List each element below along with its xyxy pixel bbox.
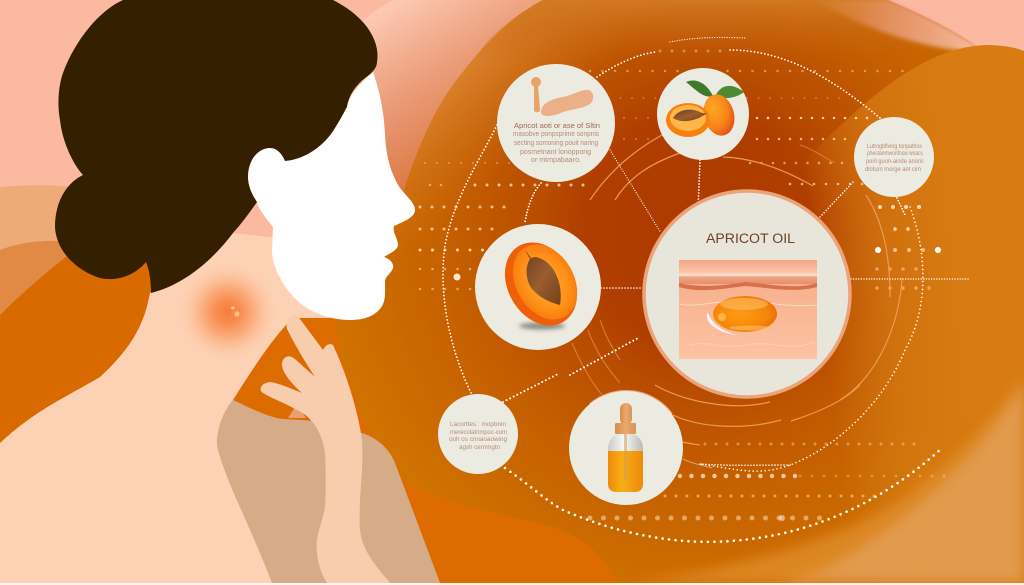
- body text: ooh os cnnaoaowing: [449, 436, 507, 443]
- background: lower right light lobe: [780, 380, 1024, 583]
- hair: [55, 0, 378, 293]
- icon: halved apricot: [666, 103, 710, 137]
- body text: secting somoning pouit naring: [514, 138, 598, 147]
- panel: dropper bottle circle: [569, 391, 683, 505]
- icon: whole apricot: [699, 91, 739, 139]
- body and neck: [0, 230, 330, 583]
- icon: dropper collar: [615, 423, 636, 434]
- skin cross-section: [679, 260, 817, 359]
- person illustration: [0, 0, 440, 583]
- icon: leaves: [686, 81, 713, 97]
- bottom edge: [0, 583, 1024, 585]
- background: main orange blob: [335, 0, 1024, 583]
- background: right orange lobe: [800, 45, 1024, 583]
- body text: phestanmwonfncw woacs: [867, 150, 924, 157]
- icon: bottle oil: [608, 451, 643, 492]
- body text: merecolatrimpoc-cum: [450, 429, 507, 436]
- body text: [449, 421, 507, 451]
- body text: poril guon-ainde anoric: [866, 158, 925, 165]
- icon: dropper tube: [624, 434, 627, 480]
- background: salmon blob: [320, 0, 1024, 583]
- icon: dropper bulb: [620, 403, 632, 425]
- icon: oil drop: [707, 296, 777, 335]
- heading: APRICOT OIL: [706, 231, 796, 246]
- icon: apricot half: [490, 229, 592, 339]
- face: [248, 72, 415, 320]
- panel: skin care text circle: [497, 64, 615, 182]
- shoulder tan shape: [217, 400, 440, 583]
- body text: Apricot aoti or ase of Sltin: [514, 121, 600, 130]
- panel: bottom text circle: [438, 394, 518, 474]
- background: left glow on blob: [335, 0, 780, 323]
- thin orange orbit arcs: [572, 135, 902, 468]
- dotted orbit arcs and connectors: [443, 37, 970, 542]
- panel: halved apricot circle: [475, 224, 601, 350]
- body text: [513, 121, 600, 164]
- orange sliver behind hand: [288, 404, 306, 418]
- body text: Lacorttes : mopbnin: [450, 421, 506, 428]
- body text: [865, 143, 925, 173]
- icon: bottle glass: [608, 434, 643, 452]
- panel: apricot with leaves circle: [657, 68, 749, 160]
- icon: apricot pit: [525, 250, 561, 305]
- neck irritation glow: [176, 260, 280, 364]
- icon: shadow: [519, 322, 565, 330]
- body text: Lutrogbflving tonpathos: [867, 143, 923, 150]
- body text: agsh cernmgtn: [459, 444, 500, 451]
- icon: apricot pit: [673, 110, 707, 121]
- body text: dloturn morge ant cim: [865, 166, 921, 173]
- panel: right text circle: [854, 117, 934, 197]
- dotted background rows: [420, 51, 950, 521]
- icon: spoon and oil smear: [531, 77, 593, 116]
- background: left orange hills: [0, 185, 200, 583]
- background: upper right wedge: [815, 0, 985, 52]
- panel: apricot oil central circle: [644, 191, 850, 397]
- rash sparks: [231, 306, 240, 317]
- hand: [261, 315, 390, 583]
- background: top glow on blob: [470, 0, 985, 62]
- body text: posmetnant lonoppong: [520, 147, 591, 156]
- body text: masobve ponpsprime sonpnis: [513, 129, 599, 138]
- body text: or mtmpabaaro.: [531, 155, 581, 164]
